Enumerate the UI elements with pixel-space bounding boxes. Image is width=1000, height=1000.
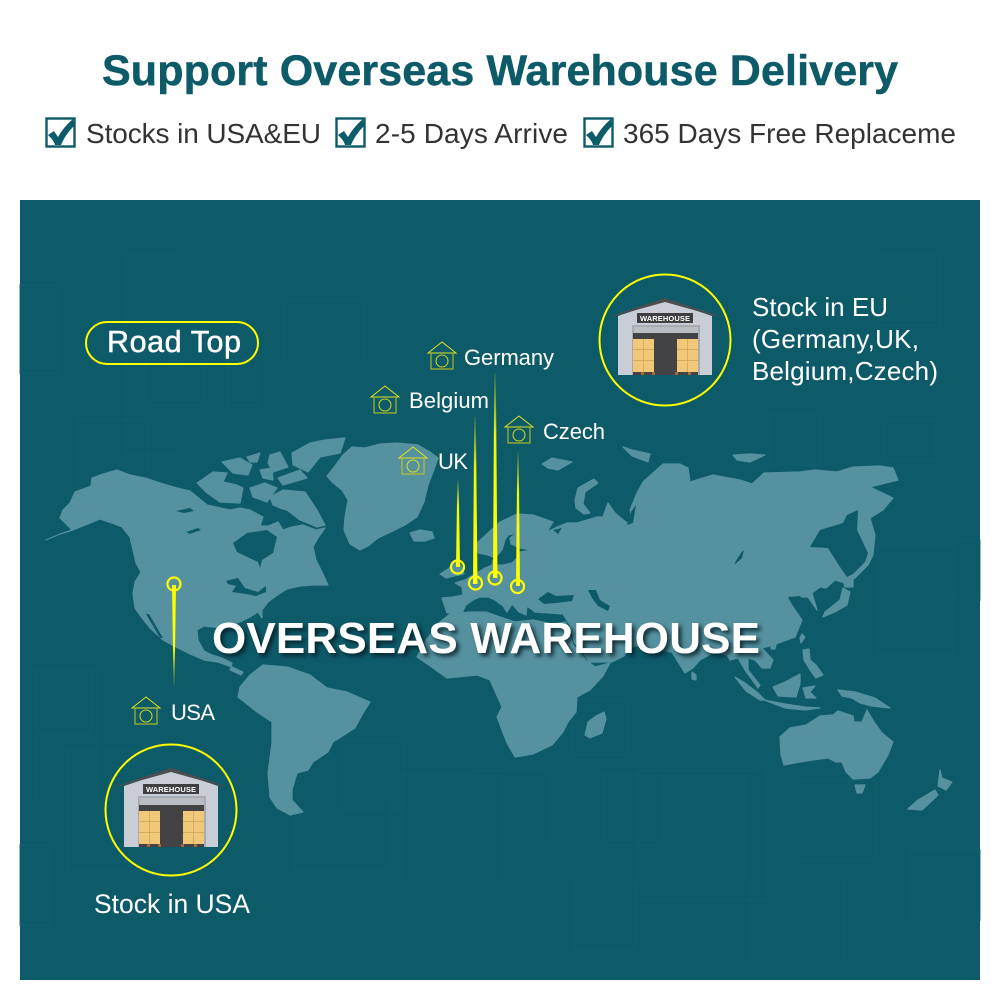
- feature: 365 days free replacement: 365 Days Free Replaceme: [623, 118, 956, 149]
- label: USA: USA: [171, 700, 215, 725]
- land: Great Britain and Ireland: [440, 562, 464, 578]
- Caspian Sea: [588, 590, 610, 611]
- White Sea and Kara inlets: [553, 505, 636, 534]
- land: Sri Lanka: [692, 672, 696, 680]
- land: northern islands: [542, 447, 765, 470]
- pin: USA: [168, 578, 180, 686]
- land: Australia: [780, 710, 893, 779]
- label: stock in EU: Stock in EU: [752, 292, 888, 322]
- title: Support Overseas Warehouse Delivery: [102, 47, 898, 95]
- land: Madagascar: [585, 712, 606, 738]
- land: Japan: [823, 588, 850, 617]
- land: Iceland: [410, 530, 434, 541]
- icon: house Belgium: [371, 386, 399, 413]
- label: Germany: Germany: [464, 345, 554, 370]
- label: Belgium: Belgium: [409, 388, 489, 413]
- land: Arctic islands group: [222, 452, 307, 502]
- land: Tasmania: [855, 785, 865, 793]
- Yellow Sea inlet: [788, 596, 805, 608]
- icon: house USA: [132, 697, 160, 724]
- land: Sulawesi: [803, 686, 816, 698]
- land: Borneo: [773, 674, 800, 697]
- land: Eurasia: [442, 464, 898, 688]
- feature: 2-5 days arrive: 2-5 Days Arrive: [375, 118, 568, 149]
- land: New Zealand: [908, 770, 952, 810]
- pin: Germany: [488, 373, 502, 584]
- land: Sumatra: [735, 677, 765, 700]
- world map: [46, 438, 952, 815]
- panel: map background: [20, 200, 980, 980]
- label: Czech: Czech: [543, 419, 605, 444]
- label: stock in EU: [752, 292, 938, 386]
- land: North America: [46, 470, 328, 675]
- Hudson Bay: [233, 530, 277, 568]
- feature: stocks in USA and EU: Stocks in USA&EU: [86, 118, 321, 149]
- badge: Road Top: Road Top: [107, 325, 241, 359]
- Gulf of California: [146, 614, 163, 638]
- feature list: [46, 118, 956, 149]
- land: Ellesmere Island: [292, 438, 345, 472]
- land: Banks and Victoria islands: [197, 472, 243, 503]
- icon: USA warehouse: [106, 744, 236, 876]
- land: Java and Lesser Sunda: [764, 700, 820, 710]
- land: Africa: [417, 612, 610, 757]
- headline: overseas warehouse: OVERSEAS WAREHOUSE: [212, 614, 760, 663]
- pin: UK: [451, 480, 464, 574]
- pin: Belgium: [469, 417, 482, 590]
- Lake Baikal: [734, 550, 744, 565]
- Great Lakes: [226, 578, 266, 596]
- label: UK: UK: [438, 449, 468, 474]
- land: Baffin Island: [270, 490, 325, 527]
- seas and lakes cut from land: [146, 505, 868, 638]
- label: stock in USA: Stock in USA: [94, 889, 250, 919]
- icon: EU warehouse: [600, 274, 730, 406]
- land: Taiwan: [800, 634, 805, 643]
- badge: Road Top: [86, 322, 258, 364]
- icon: house Germany: [428, 342, 456, 369]
- Sea of Okhotsk: [810, 510, 868, 577]
- land: New Guinea: [838, 690, 890, 708]
- land: Philippines: [803, 649, 823, 678]
- land: Greenland: [327, 443, 438, 550]
- icon: house Czech: [505, 416, 533, 443]
- label: stock in EU: Belgium,Czech): [752, 356, 938, 386]
- land: Hainan: [771, 645, 776, 649]
- land: Novaya Zemlya: [575, 479, 598, 514]
- icon: USA warehouse: WAREHOUSE: [146, 785, 196, 794]
- icon: house UK: [399, 447, 427, 474]
- Black Sea: [538, 592, 574, 604]
- land: South America: [238, 665, 370, 815]
- label: stock in EU: (Germany,UK,: [752, 324, 919, 354]
- Canadian lakes: [176, 508, 201, 534]
- pin: Czech: [511, 452, 524, 593]
- icon: EU warehouse: WAREHOUSE: [640, 314, 690, 323]
